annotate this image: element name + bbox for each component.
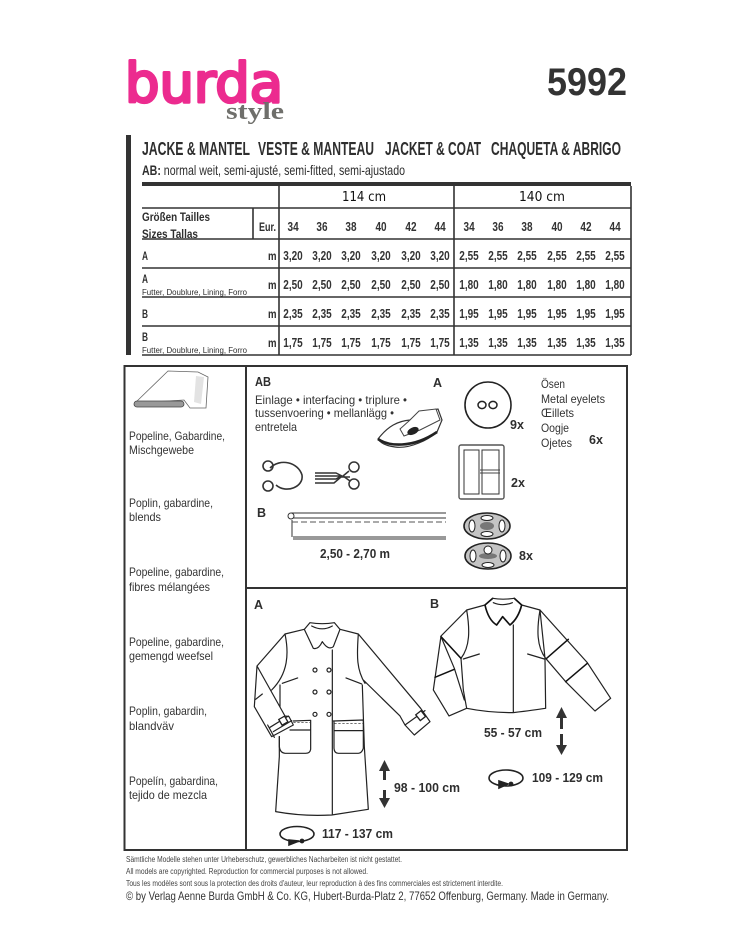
eyelets text: Ösen [541, 377, 565, 391]
row B lining values: 1,75 [283, 337, 303, 350]
row B lining values: 1,75 [371, 337, 391, 350]
footer copyright notes: Tous les modèles sont sous la protection des droits d'auteur, leur reproduction à des fins commerciales est strictement interdite. [126, 879, 503, 888]
row A lining values: 1,80 [605, 279, 625, 292]
title: VESTE & MANTEAU [258, 139, 374, 159]
row B values: 2,35 [371, 308, 391, 321]
row A lining values: 2,50 [401, 279, 421, 292]
row labels: B [142, 330, 148, 344]
size numbers: 34 [288, 221, 299, 234]
fabric names: Poplin, gabardin, [129, 704, 207, 718]
icon: zipper [257, 506, 446, 561]
row A lining values: 2,50 [341, 279, 361, 292]
icon: girth B [489, 770, 523, 788]
row B values: 1,95 [547, 308, 567, 321]
interfacing text [255, 375, 442, 434]
row A values: 3,20 [371, 250, 391, 263]
width headers: 140 cm [519, 190, 565, 205]
row B values: 2,35 [401, 308, 421, 321]
row B values: 1,95 [459, 308, 479, 321]
width headers [342, 190, 565, 205]
icon: girth A [280, 826, 314, 845]
row A lining values: 2,50 [283, 279, 303, 292]
footer copyright notes: © by Verlag Aenne Burda GmbH & Co. KG, Hubert-Burda-Platz 2, 77652 Offenburg, Germany. Made in Germany. [126, 889, 609, 903]
row B values: 1,95 [576, 308, 596, 321]
panel: jacket B [430, 597, 611, 788]
row labels: Sizes Tallas [142, 227, 198, 241]
size numbers: 36 [316, 221, 328, 234]
row B values: 1,95 [517, 308, 537, 321]
row B lining values: 1,35 [576, 337, 596, 350]
fabric names: Popeline, gabardine, [129, 565, 224, 579]
row A values: 2,55 [547, 250, 567, 263]
eyelets text: Oogje [541, 421, 569, 435]
icon: buckle: 2x [511, 476, 525, 490]
label: length A: 98 - 100 cm [394, 781, 460, 795]
fabric names: Popeline, Gabardine, [129, 429, 225, 443]
logo: burda style: burda [125, 52, 283, 115]
icon: zipper: 2,50 - 2,70 m [320, 547, 390, 561]
row labels: Größen Tailles [142, 210, 210, 224]
size numbers: 42 [580, 221, 592, 234]
icon: iron [378, 409, 442, 447]
row A lining values: 1,80 [459, 279, 479, 292]
title: JACKET & COAT [385, 139, 481, 159]
footer copyright notes: Sämtliche Modelle stehen unter Urheberschutz, gewerbliches Nacharbeiten ist nicht gestattet. [126, 855, 402, 864]
icon: hook [263, 461, 302, 491]
size numbers: 34 [464, 221, 475, 234]
size numbers: 44 [610, 221, 621, 234]
row labels: B [142, 307, 148, 321]
icon: zipper: B [257, 506, 266, 520]
row B values: 1,95 [605, 308, 625, 321]
row labels: Eur. [259, 220, 276, 234]
row A values: 3,20 [312, 250, 332, 263]
row A lining values: 2,50 [371, 279, 391, 292]
footer copyright notes [126, 855, 609, 903]
title [142, 139, 621, 159]
fabric names: tejido de mezcla [129, 788, 207, 802]
row labels [142, 210, 276, 355]
label: length B: 55 - 57 cm [484, 726, 542, 740]
row B lining values: 1,75 [312, 337, 332, 350]
row labels: A [142, 249, 148, 263]
pattern number: 5992 [547, 61, 627, 104]
row A values: 2,55 [576, 250, 596, 263]
size numbers: 38 [345, 221, 357, 234]
row A values: 2,55 [488, 250, 508, 263]
row labels: m [268, 249, 276, 263]
row B values: 2,35 [312, 308, 332, 321]
row B lining values: 1,35 [459, 337, 479, 350]
main panel frame [124, 366, 627, 850]
icon: snap fasteners: 8x [519, 549, 533, 563]
row B values: 1,95 [488, 308, 508, 321]
row A values: 2,55 [605, 250, 625, 263]
coat drawing [254, 623, 430, 815]
interfacing text: Einlage • interfacing • triplure • [255, 393, 407, 407]
eyelets text: Metal eyelets [541, 392, 605, 406]
size numbers: 42 [405, 221, 417, 234]
interfacing text: tussenvoering • mellanlägg • [255, 406, 394, 420]
icon: fabric bolt [134, 371, 208, 408]
fabric names [129, 429, 225, 802]
eyelets text: Œillets [541, 406, 574, 420]
row labels: m [268, 278, 276, 292]
size numbers: 40 [375, 221, 387, 234]
fabric names: blends [129, 510, 161, 524]
icon: button: 9x [510, 418, 524, 432]
row B values [283, 308, 625, 321]
eyelets text: Ojetes [541, 436, 572, 450]
row B lining values: 1,75 [401, 337, 421, 350]
row A values: 3,20 [401, 250, 421, 263]
width headers: 114 cm [342, 190, 386, 205]
row B lining values: 1,35 [605, 337, 625, 350]
row labels: m [268, 307, 276, 321]
row labels: Futter, Doublure, Lining, Forro [142, 287, 247, 297]
title: JACKE & MANTEL [142, 139, 250, 159]
row A lining values: 1,80 [576, 279, 596, 292]
arrow: length A [379, 760, 390, 808]
row B lining values: 1,35 [488, 337, 508, 350]
row A values: 3,20 [283, 250, 303, 263]
row A values: 2,55 [517, 250, 537, 263]
row A values [283, 250, 625, 263]
row A lining values: 1,80 [547, 279, 567, 292]
row A values: 3,20 [341, 250, 361, 263]
label: girth A: 117 - 137 cm [322, 827, 393, 841]
title: CHAQUETA & ABRIGO [491, 139, 621, 159]
subtitle: AB: normal weit, semi-ajusté, semi-fitted, semi-ajustado [142, 162, 405, 178]
panel: coat A [254, 598, 460, 845]
row A lining values: 2,50 [312, 279, 332, 292]
footer copyright notes: All models are copyrighted. Reproduction for commercial purposes is not allowed. [126, 867, 368, 876]
row B lining values: 1,75 [341, 337, 361, 350]
panel: fabrics [129, 371, 225, 802]
row A lining values [283, 279, 625, 292]
row labels: A [142, 272, 148, 286]
row A values: 2,55 [459, 250, 479, 263]
size numbers: 38 [521, 221, 533, 234]
fabric names: fibres mélangées [129, 580, 210, 594]
row A lining values: 1,80 [517, 279, 537, 292]
fabric names: blandväv [129, 719, 174, 733]
size numbers [288, 221, 621, 234]
fabric names: Popelín, gabardina, [129, 774, 218, 788]
fabric names: Poplin, gabardine, [129, 496, 213, 510]
yardage table [142, 182, 631, 355]
panel: coat A: A [254, 598, 263, 612]
row B lining values: 1,35 [547, 337, 567, 350]
icon: button [465, 382, 524, 432]
interfacing text: A [433, 376, 442, 390]
row B lining values [283, 337, 625, 350]
row B values: 2,35 [283, 308, 303, 321]
panel: jacket B: B [430, 597, 439, 611]
fabric names: Popeline, gabardine, [129, 635, 224, 649]
eyelets text [541, 377, 605, 450]
row A lining values: 2,50 [430, 279, 450, 292]
arrow: length B [556, 707, 567, 755]
left vertical bar [126, 135, 131, 355]
fabric names: Mischgewebe [129, 443, 194, 457]
row B lining values: 1,35 [517, 337, 537, 350]
label: girth B: 109 - 129 cm [532, 771, 603, 785]
row B lining values: 1,75 [430, 337, 450, 350]
eyelets text: 6x [589, 433, 603, 447]
logo: burda style: style [226, 99, 284, 125]
size numbers: 44 [435, 221, 446, 234]
row B values: 2,35 [430, 308, 450, 321]
interfacing text: entretela [255, 420, 297, 434]
fabric names: gemengd weefsel [129, 649, 213, 663]
row A lining values: 1,80 [488, 279, 508, 292]
icon: buckle [459, 445, 525, 499]
interfacing text: AB [255, 375, 271, 389]
row A values: 3,20 [430, 250, 450, 263]
size numbers: 36 [492, 221, 504, 234]
jacket drawing [433, 598, 611, 716]
row B values: 2,35 [341, 308, 361, 321]
icon: snap fasteners [464, 513, 533, 569]
panel: notions [255, 375, 605, 569]
row labels: Futter, Doublure, Lining, Forro [142, 345, 247, 355]
size numbers: 40 [551, 221, 563, 234]
icon: eye [315, 462, 359, 489]
row labels: m [268, 336, 276, 350]
